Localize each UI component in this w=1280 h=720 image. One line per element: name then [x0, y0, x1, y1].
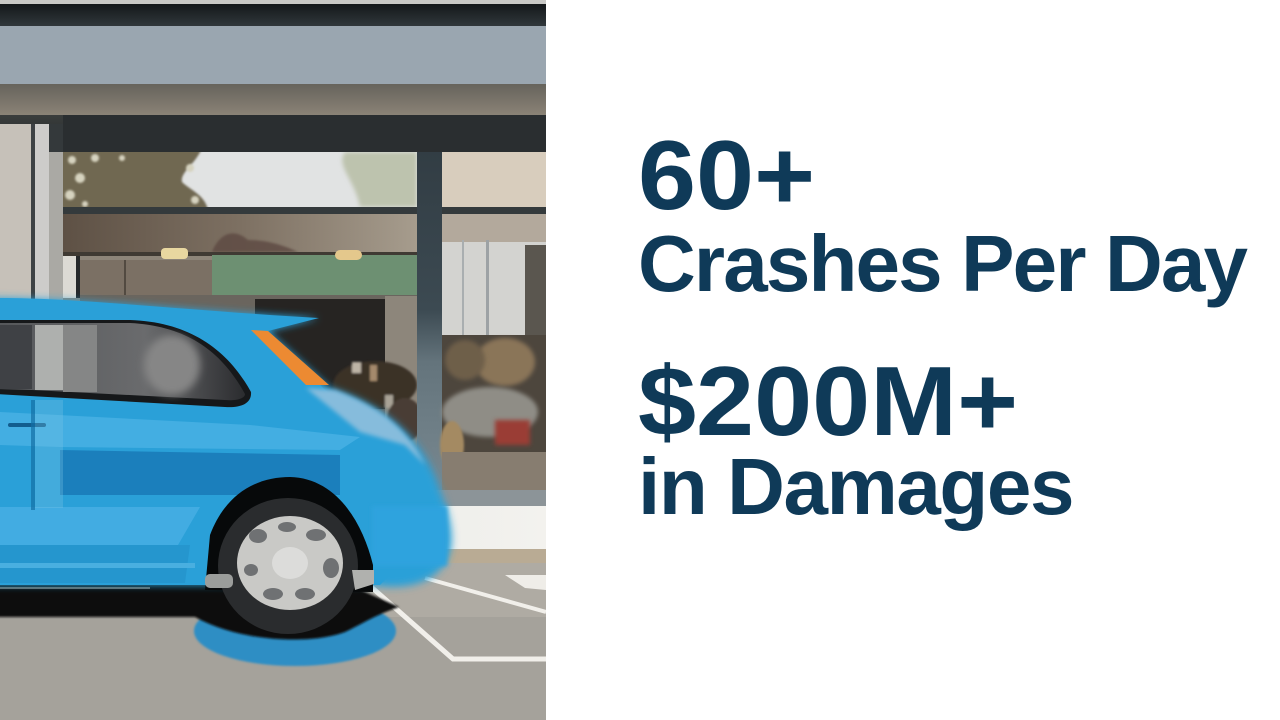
pillar reflection on car: [31, 400, 35, 510]
suspension brackets: [205, 574, 233, 588]
wheel arch: [205, 477, 373, 592]
rear hood highlight: [306, 388, 425, 465]
stat: damages: [638, 346, 1073, 531]
ceiling lights: [161, 248, 362, 260]
stat label: crashes per day: Crashes Per Day: [638, 219, 1246, 308]
car body: [0, 298, 452, 587]
upper window with trees: [60, 148, 417, 210]
tyre: [218, 498, 358, 634]
stat value: 60+: 60+: [638, 120, 815, 230]
plant reflection: [212, 233, 298, 252]
illustration: blue car passing storefront: [0, 0, 546, 720]
ground shadow and lower tyre: [0, 583, 399, 666]
front wheel: [205, 477, 374, 634]
body panels: [0, 412, 360, 450]
blue car: [0, 298, 452, 587]
stat: crashes per day: [638, 120, 1248, 308]
rim: [237, 516, 343, 610]
storefront building: [0, 0, 546, 720]
door handle: [8, 423, 46, 427]
side window: [0, 320, 251, 407]
pavement and parking lines: [0, 490, 546, 720]
stat label: in damages: in Damages: [638, 442, 1073, 531]
merchandise inside window: [333, 361, 423, 442]
stat value: $200M+: $200M+: [638, 346, 1018, 456]
rear glass accent: [251, 330, 329, 385]
right window display: [440, 214, 546, 490]
